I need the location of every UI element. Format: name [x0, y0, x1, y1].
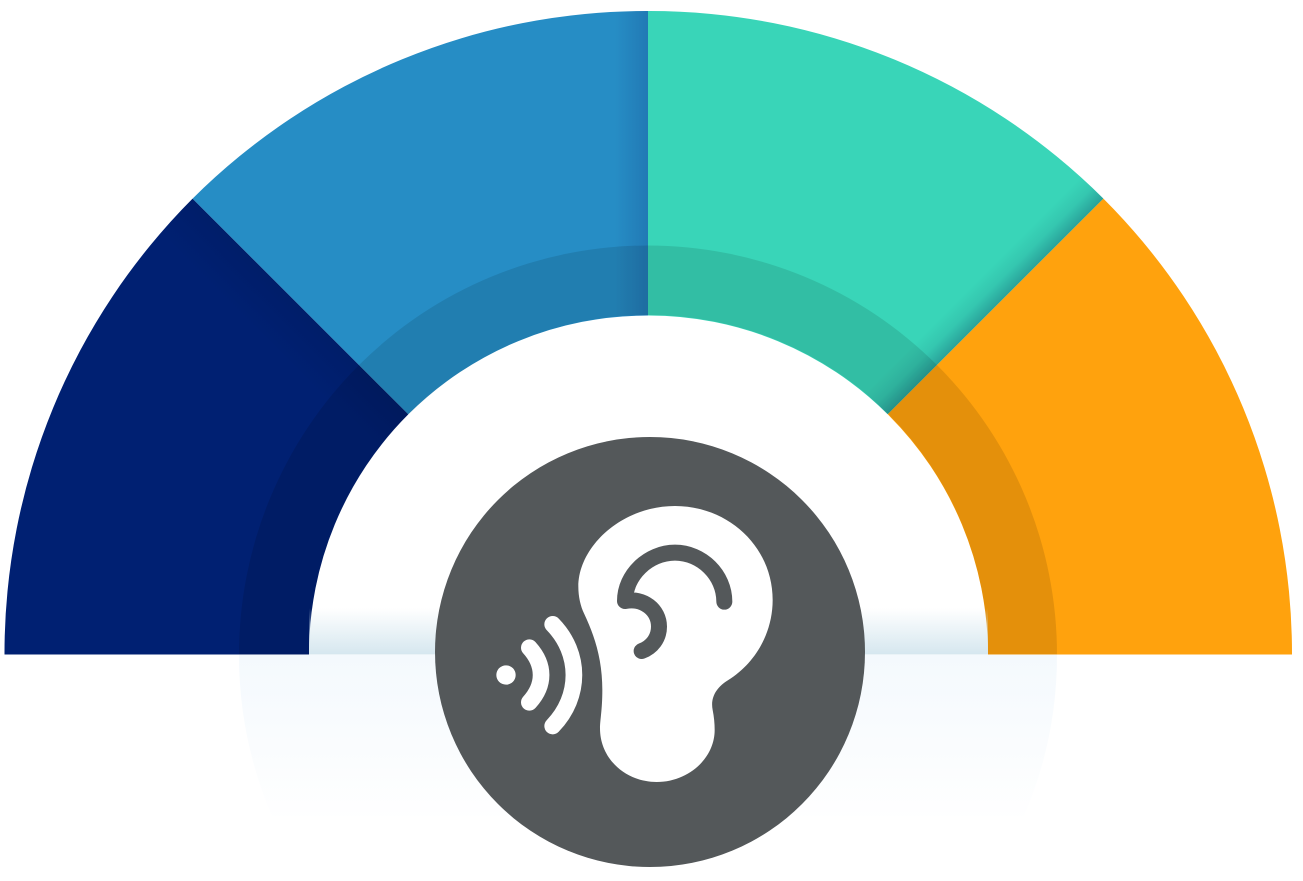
gauge segment: orange: [888, 199, 1292, 654]
icon: grey circle badge: [435, 437, 865, 867]
inner ear line: [625, 553, 724, 651]
small sound wave: [529, 648, 541, 702]
gauge segment: navy: [4, 199, 408, 654]
gauge segment: teal: [648, 11, 1103, 414]
inner dark ring overlay: [239, 246, 1057, 655]
icon: ear with sound waves: [496, 506, 773, 782]
gauge segment: blue: [193, 11, 648, 414]
inner white semicircle shading: [309, 608, 988, 654]
sound dot: [496, 665, 516, 685]
ear shape: [578, 506, 773, 782]
large sound wave: [553, 624, 574, 726]
lower ring reflection: [239, 655, 1057, 816]
